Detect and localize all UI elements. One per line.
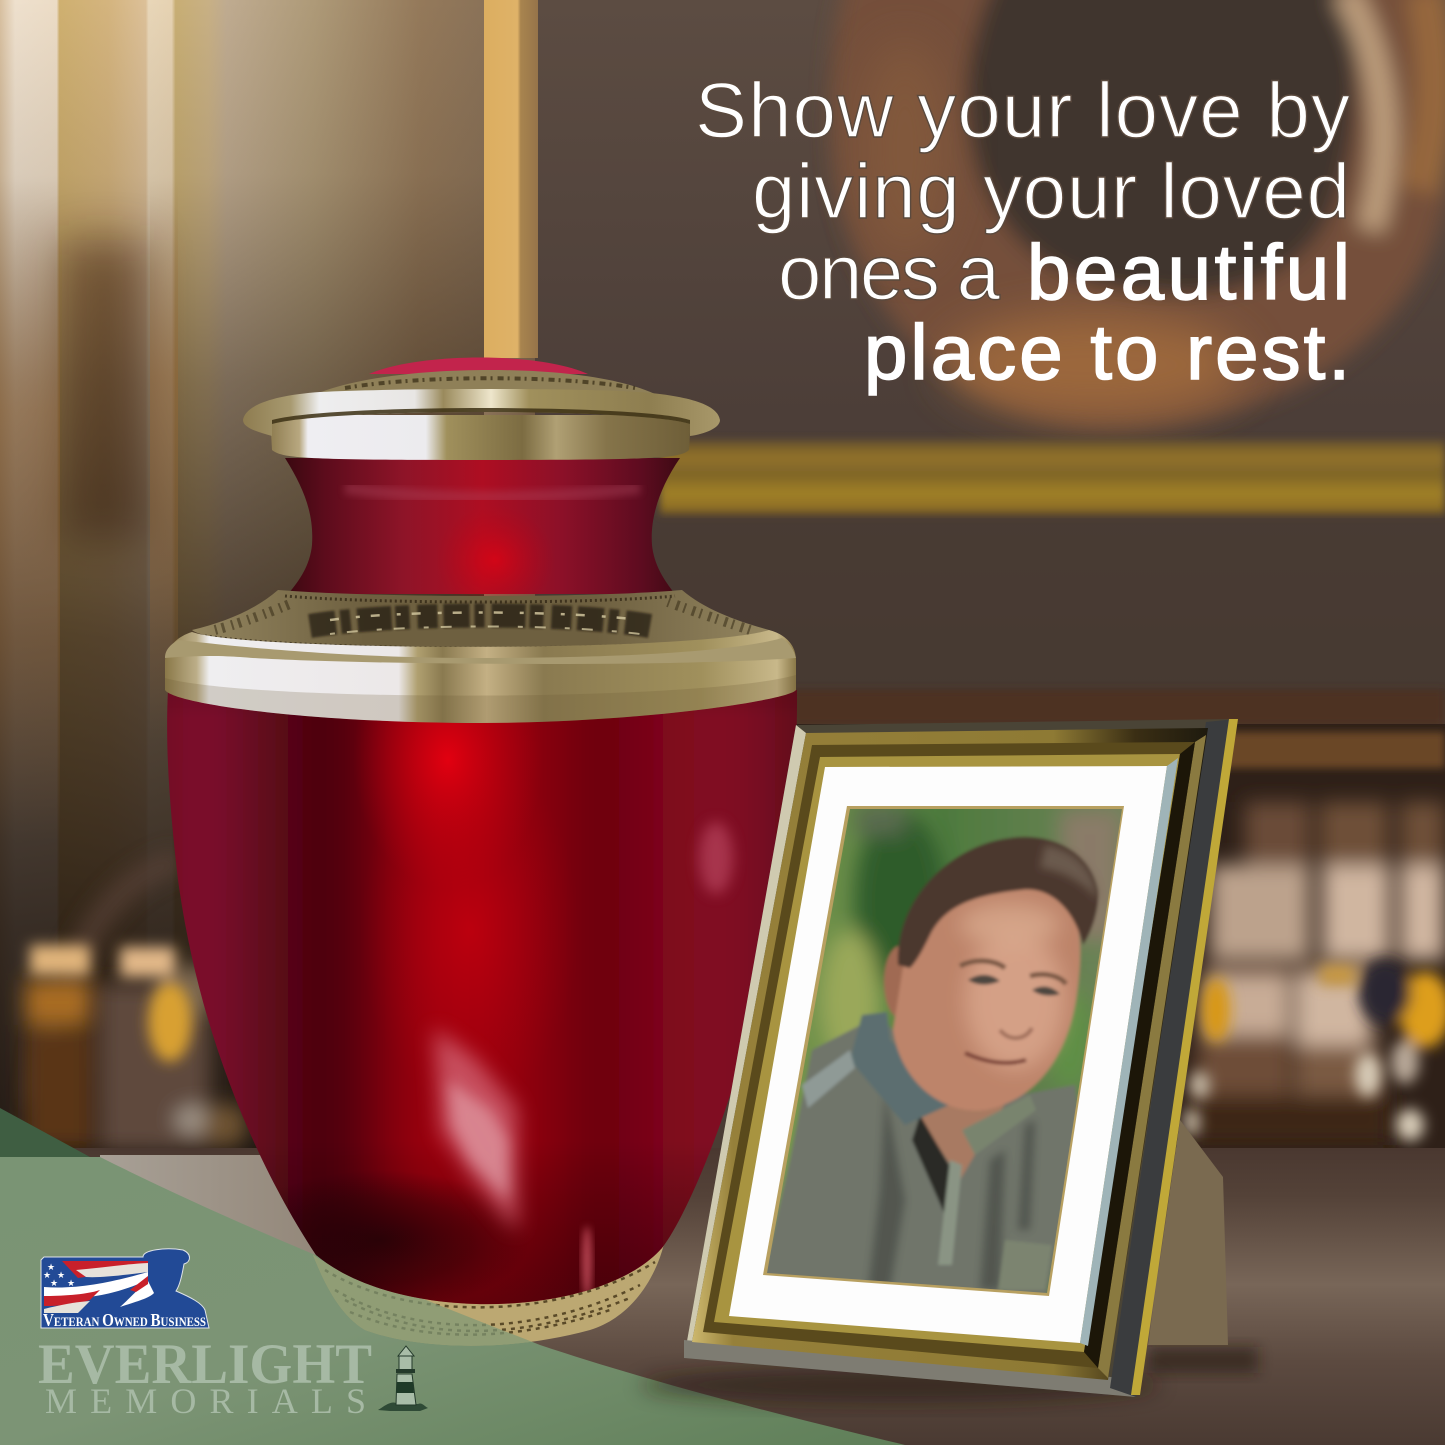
- flag stripes: ★: [67, 1279, 75, 1289]
- headline: ones a: [778, 228, 1001, 316]
- collar: [852, 1011, 948, 1124]
- portrait photo: [760, 805, 1130, 1300]
- urn neck: [285, 458, 680, 615]
- flag stripes: ★: [43, 1271, 51, 1281]
- outer frame: [684, 719, 1236, 1397]
- headline: [695, 66, 1350, 396]
- logo: Everlight Memorials wordmark: [38, 1333, 372, 1421]
- neck and placket: [920, 1104, 1005, 1178]
- urn base band: [313, 1244, 664, 1346]
- headline: place to rest.: [864, 308, 1350, 396]
- face: [893, 885, 1080, 1110]
- shirt: [760, 1015, 1080, 1300]
- gold wall rail: [660, 440, 1445, 516]
- flag stripes: ★: [50, 1279, 58, 1289]
- urn body: [167, 690, 797, 1304]
- mouth: [965, 1053, 1026, 1063]
- left bokeh objects: [25, 860, 247, 1150]
- nose shadow: [1000, 1028, 1032, 1038]
- headline: Show your love by: [695, 66, 1350, 154]
- frame stand: [1148, 1120, 1228, 1345]
- logo: veteran owned business badge: [41, 1249, 209, 1330]
- urn: [60, 358, 900, 1380]
- badge background: [41, 1249, 209, 1328]
- flag stripes: ★: [57, 1271, 65, 1281]
- brows: [960, 961, 1066, 984]
- shadow under frame: [640, 1367, 1160, 1403]
- flag stripes: [43, 1261, 154, 1313]
- table top: [0, 1148, 1445, 1445]
- eyes: [968, 975, 1060, 996]
- shoulder seam: [802, 1050, 855, 1108]
- white mat: [729, 766, 1167, 1343]
- hair: [898, 837, 1098, 968]
- mirror ring: [830, 0, 1445, 428]
- urn lid: [243, 358, 720, 436]
- inner frame lip: [714, 754, 1180, 1352]
- right bokeh objects: [1184, 802, 1445, 1145]
- logo: Everlight Memorials wordmark: MEMORIALS: [45, 1381, 366, 1421]
- urn gold rim: [165, 630, 796, 723]
- headline: beautiful: [1027, 228, 1350, 316]
- ear: [882, 944, 904, 1016]
- urn floral shoulder band: [192, 590, 769, 654]
- shelf: [790, 690, 1445, 726]
- icon: lighthouse: [378, 1346, 428, 1411]
- logo: Everlight Memorials wordmark: EVERLIGHT: [38, 1333, 372, 1396]
- headline: giving your loved: [752, 147, 1350, 235]
- photo background foliage: [760, 805, 1130, 1295]
- flag stripes: ★: [47, 1263, 55, 1273]
- urn collar: [270, 415, 691, 460]
- gold moulding: [692, 728, 1208, 1380]
- green corner banner: [0, 1108, 905, 1445]
- picture frame with portrait: [684, 719, 1238, 1397]
- badge text: VETERAN OWNED BUSINESS: [43, 1310, 206, 1330]
